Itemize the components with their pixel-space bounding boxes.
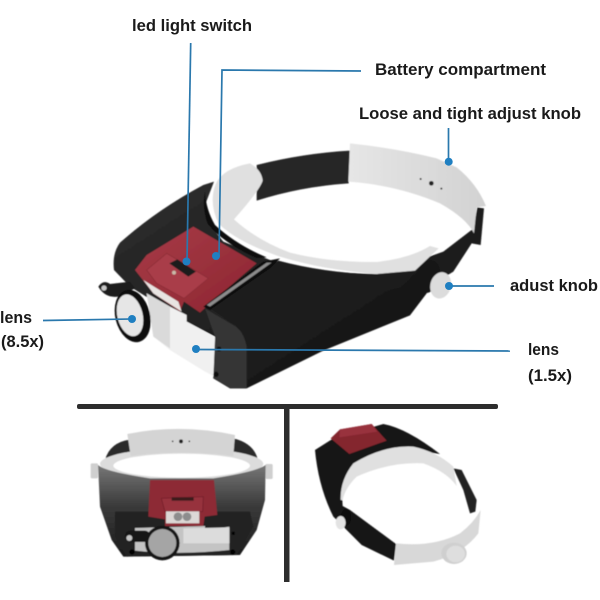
housing lower face bbox=[115, 512, 253, 557]
main product photo: headband magnifier bbox=[98, 143, 486, 388]
callout: led light switch: led light switch bbox=[132, 16, 252, 35]
callout: lens 1.5x: lens bbox=[528, 340, 559, 359]
callout: battery compartment: Battery compartment bbox=[375, 60, 546, 79]
white strap bbox=[127, 429, 235, 456]
8.5x loupe arm bbox=[98, 282, 135, 297]
callout: adjust knob bbox=[445, 276, 598, 295]
loupe bbox=[145, 526, 180, 560]
holes bbox=[172, 439, 190, 443]
switch plate bbox=[147, 253, 208, 298]
far band bbox=[453, 468, 477, 513]
white strap bbox=[394, 510, 481, 565]
callout: battery compartment bbox=[212, 60, 546, 260]
1.5x lens bbox=[147, 293, 215, 376]
housing front edge bbox=[205, 308, 247, 388]
liner shadow bbox=[204, 192, 267, 258]
housing bbox=[98, 465, 266, 557]
large lens bbox=[135, 526, 229, 553]
white adjust strap bbox=[348, 143, 486, 233]
callout: loose and tight adjust knob: Loose and tight adjust knob bbox=[359, 104, 581, 123]
LED strip bbox=[143, 280, 182, 312]
headband opening bbox=[113, 454, 250, 478]
liner bbox=[341, 447, 457, 500]
red compartment bbox=[148, 480, 217, 526]
red battery compartment bbox=[135, 227, 257, 313]
side knobs bbox=[91, 463, 98, 478]
rail highlight bbox=[207, 263, 272, 307]
callout: adjust knob: adust knob bbox=[510, 276, 598, 295]
side knob bbox=[341, 509, 351, 526]
divider lines bbox=[77, 404, 498, 582]
callout: lens 8.5x: (8.5x) bbox=[1, 332, 44, 351]
callout: lens 1.5x: (1.5x) bbox=[528, 366, 572, 385]
callout: led light switch bbox=[132, 16, 252, 266]
rear view photo bbox=[315, 424, 481, 565]
strap holes bbox=[420, 178, 442, 190]
housing bbox=[315, 424, 440, 561]
led switch bbox=[169, 259, 196, 277]
white headband liner bbox=[213, 163, 439, 274]
adjust knob bbox=[413, 258, 444, 296]
back strap sides bbox=[105, 438, 258, 467]
red compartment bbox=[331, 424, 387, 454]
right rail bbox=[203, 258, 280, 310]
loupe arm bbox=[125, 531, 150, 542]
LEDs bbox=[166, 511, 199, 523]
front view photo bbox=[91, 429, 273, 560]
callout: loose and tight adjust knob bbox=[359, 104, 581, 166]
rear black strap bbox=[257, 151, 350, 201]
callout: lens 1.5x bbox=[192, 340, 572, 385]
callout: lens 8.5x bbox=[0, 308, 136, 351]
rear knob bbox=[441, 543, 467, 564]
magnifier housing bbox=[114, 182, 437, 388]
screws bbox=[129, 549, 135, 555]
right black band bbox=[410, 207, 484, 290]
8.5x loupe bbox=[109, 286, 156, 346]
callout: lens 8.5x: lens bbox=[0, 308, 32, 327]
housing top face bbox=[205, 261, 418, 327]
lens screws bbox=[217, 347, 221, 351]
liner ring bbox=[100, 448, 263, 480]
